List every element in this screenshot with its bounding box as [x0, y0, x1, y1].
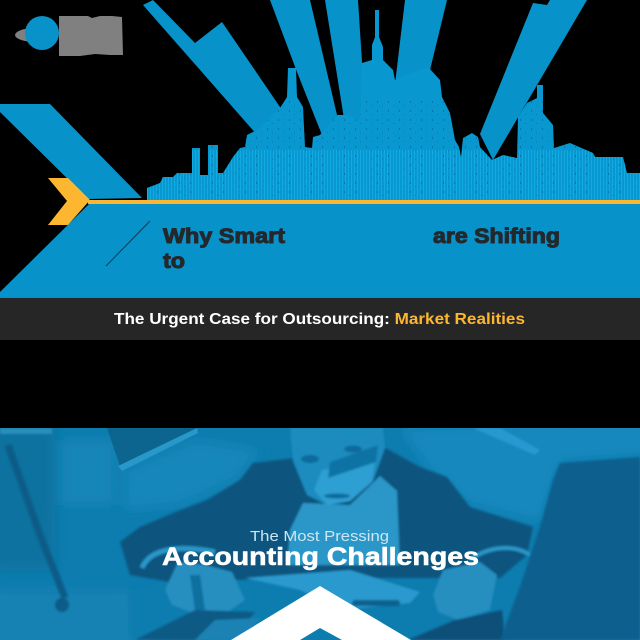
ray 4 — [395, 0, 447, 84]
back wall panel — [60, 440, 115, 505]
thin diagonal line — [106, 221, 150, 266]
laptop — [500, 457, 640, 640]
paper — [245, 570, 420, 610]
light rays — [143, 0, 587, 160]
left hand shadow — [190, 575, 205, 610]
logo: ring — [15, 28, 57, 42]
lamp head — [0, 428, 52, 434]
ray 2 — [270, 0, 337, 135]
monitor edge — [118, 428, 198, 471]
lamp base — [55, 598, 69, 612]
ray 1 — [143, 0, 282, 136]
keyboard — [408, 610, 505, 640]
rule — [88, 200, 640, 204]
yellow chevron and rule — [48, 178, 640, 225]
calculator — [135, 610, 255, 640]
soft background shapes — [0, 420, 640, 640]
dark subtitle bar — [0, 298, 640, 340]
mouth — [324, 494, 350, 498]
upper right wall — [400, 420, 640, 522]
arrow upper wing — [0, 104, 142, 199]
lamp arm — [8, 445, 65, 598]
section heading — [162, 528, 479, 571]
subtitle: The Urgent Case for Outsourcing: Market Realities — [114, 311, 525, 328]
left wall shade — [0, 420, 55, 570]
logo: wordmark — [59, 16, 123, 56]
ray 5 — [480, 0, 587, 160]
main heading — [163, 225, 560, 273]
left sleeve arc — [142, 549, 215, 568]
lower left desk — [0, 590, 160, 640]
heading: right words: are Shifting — [433, 225, 560, 248]
blue title band — [0, 203, 640, 298]
left eye — [301, 455, 319, 463]
skyline vertical stripes — [140, 150, 640, 201]
right eye — [344, 446, 362, 452]
jacket — [120, 445, 533, 582]
figure — [120, 428, 533, 640]
left hand — [165, 562, 245, 612]
section heading: light line: The Most Pressing — [250, 528, 389, 545]
logo: globe — [25, 16, 59, 50]
heading: left words: Why Smart — [163, 225, 285, 248]
heading: second line: to — [163, 250, 185, 273]
paper digits — [352, 600, 400, 606]
dark monitor — [107, 428, 197, 466]
white chevron — [231, 586, 411, 640]
city skyline — [140, 0, 640, 201]
face — [290, 428, 385, 505]
skyline windows — [140, 100, 640, 201]
photo base — [0, 428, 640, 640]
skyline fill — [140, 0, 640, 201]
right sleeve arc — [470, 548, 530, 560]
right monitor edge — [473, 428, 540, 455]
logo — [15, 16, 123, 56]
face light band — [314, 462, 375, 505]
calculator keys — [195, 618, 262, 640]
nose shadow band — [328, 445, 378, 478]
back shelf — [125, 440, 260, 510]
photo section — [0, 420, 640, 640]
right hand — [433, 562, 497, 620]
desk surface — [130, 599, 147, 638]
ray 3 — [325, 0, 366, 125]
shirt — [287, 476, 400, 565]
desk lamp — [0, 428, 69, 612]
section heading: bold line: Accounting Challenges — [162, 543, 479, 571]
chevron — [48, 178, 90, 225]
